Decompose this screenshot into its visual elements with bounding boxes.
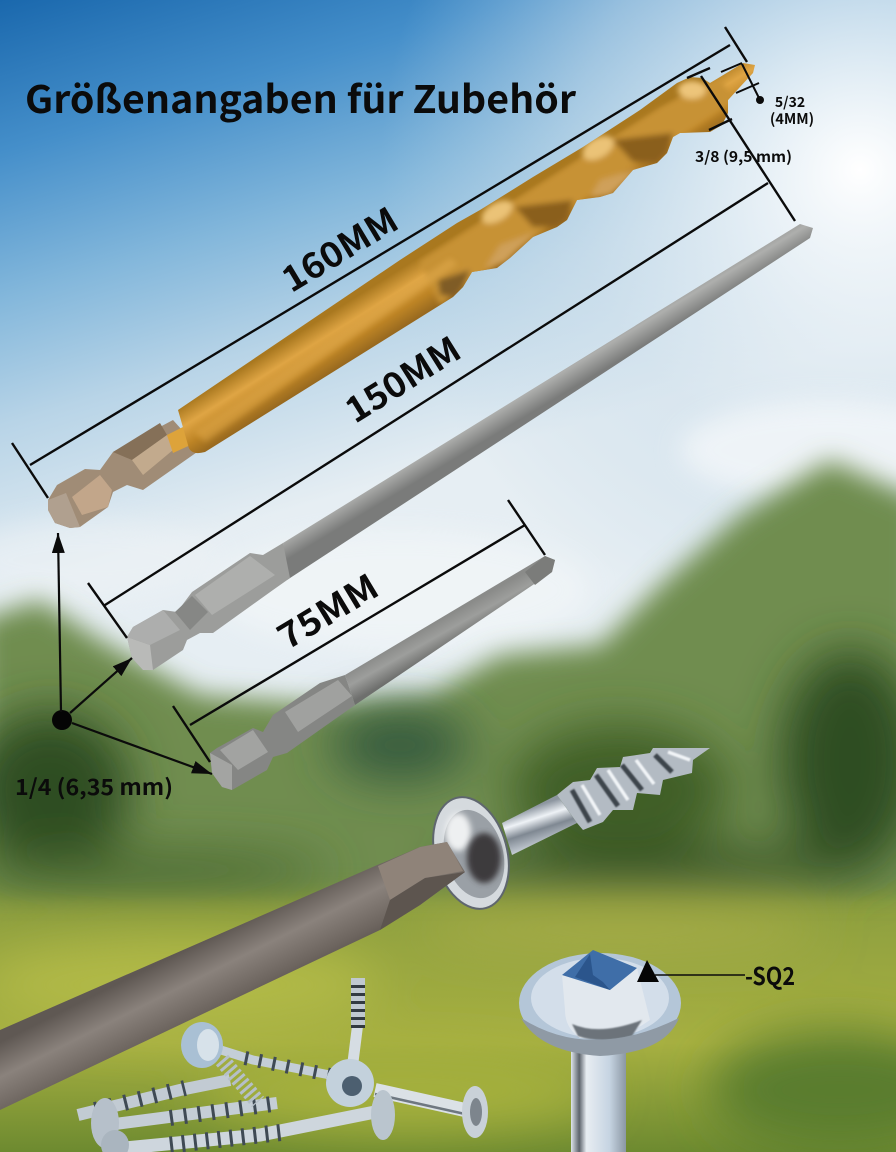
dimension: 150MM [88,183,768,638]
small screw: upper left [78,1080,230,1115]
fluted body [178,63,755,453]
background: sky [0,0,896,760]
large screw with washer head [421,748,710,917]
gold drill bit [48,63,755,528]
title: Größenangaben für Zubehör [25,69,576,124]
small screw: diagonal cross [222,1060,258,1102]
hex shank [48,420,200,528]
label: 4MM: (4MM) [770,108,814,129]
gray bit 150mm [127,224,813,670]
small screw: vertical [326,978,374,1107]
small screw: top left head [181,1022,330,1075]
small screw: middle [91,1098,277,1148]
dimension: 160MM: 160MM [271,193,407,303]
dimension: 150MM: 150MM [334,322,469,433]
background: blurred trees and meadow [0,460,896,1152]
small screw: lower [101,1090,395,1152]
dimension: 3/8 and tip detail [687,63,795,221]
small screw: right [375,1086,488,1138]
SQ2 screw head [519,950,681,1152]
small screw group [78,978,488,1152]
large driver bit [0,842,465,1110]
dimension: 75MM [173,500,545,762]
dimension: 75MM: 75MM [266,560,387,660]
label: 5/32: 5/32 [775,92,805,112]
label: 3/8: 3/8 (9,5 mm) [695,146,792,167]
label: SQ2: -SQ2 [745,957,795,992]
label: 1/4: 1/4 (6,35 mm) [15,770,173,802]
callout: 1/4 hex arrows [52,533,212,774]
callout: SQ2 pointer [637,960,745,982]
gray bit 75mm [210,556,555,790]
